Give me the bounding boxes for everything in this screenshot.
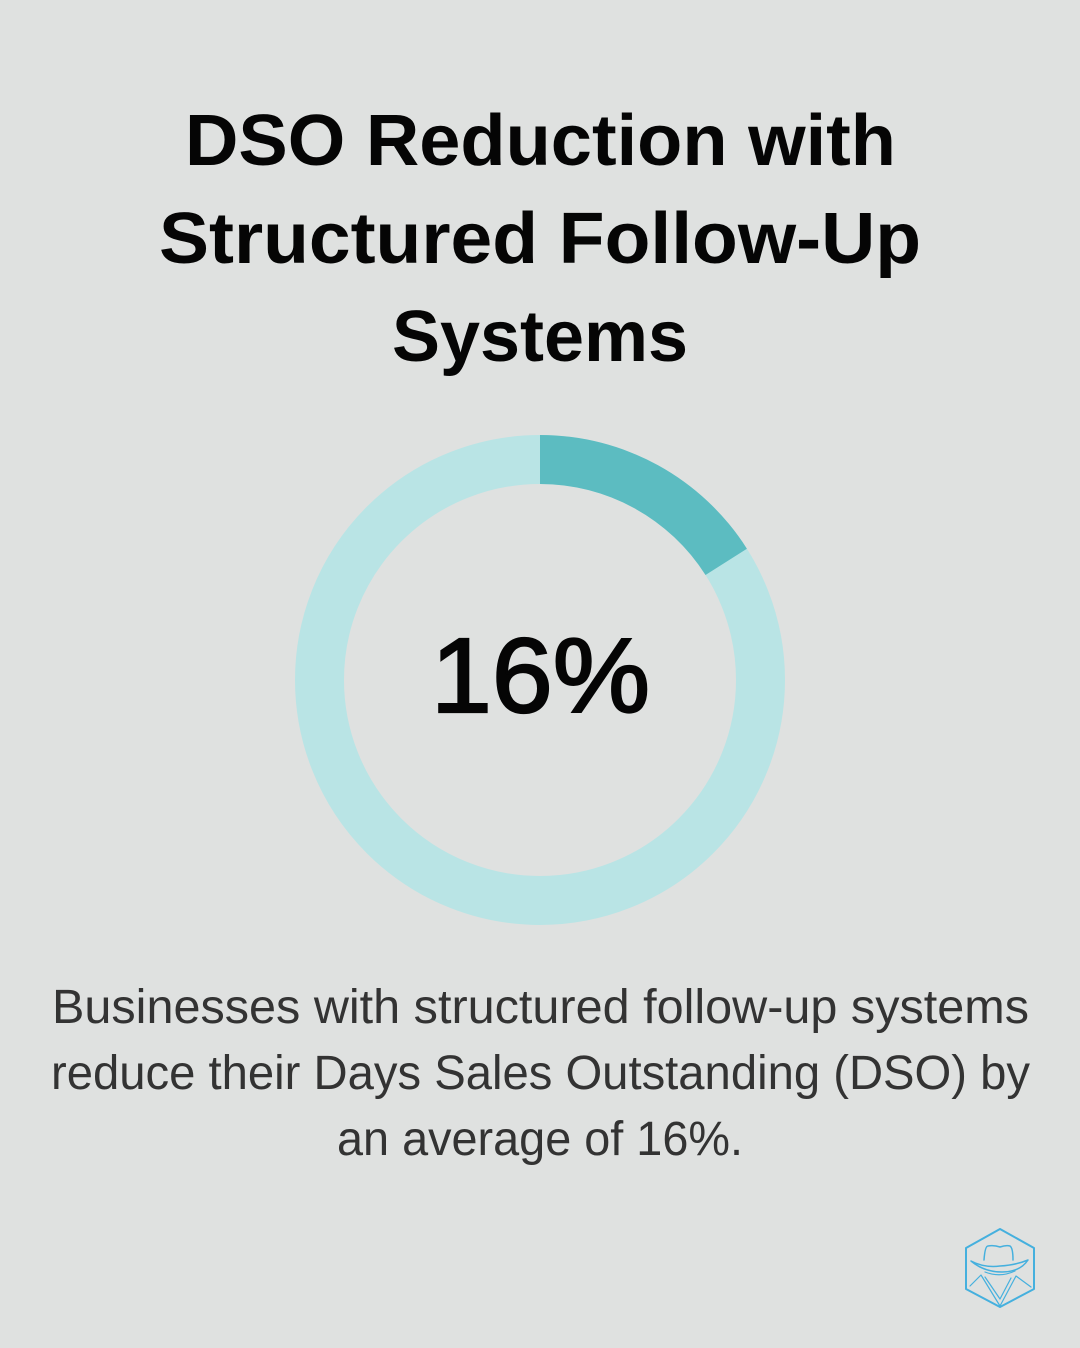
description text: Businesses with structured follow-up systems [52,981,1029,1034]
description text: reduce their Days Sales Outstanding (DSO) by [51,1047,1030,1100]
title [159,101,921,377]
description text [51,981,1030,1166]
donut chart: 16% [320,435,760,900]
title: Structured Follow-Up [159,199,921,279]
title: DSO Reduction with [185,101,896,181]
description text: an average of 16%. [337,1113,743,1166]
title: Systems [392,297,688,377]
icon: logo, hexagon with hat-wearing spy [966,1229,1034,1307]
highlighted arc: 16 percent segment [540,435,747,575]
central value: 16% [431,617,650,735]
